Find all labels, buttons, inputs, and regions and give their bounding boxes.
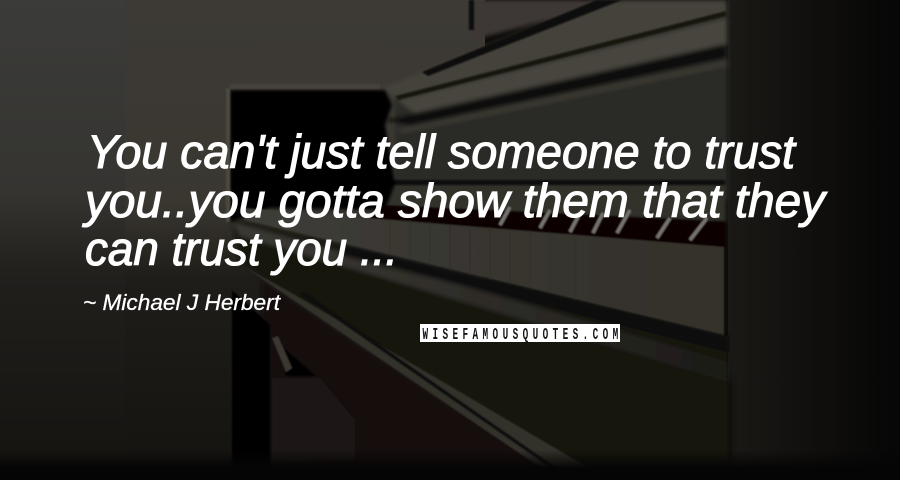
keyboard lower band <box>233 222 728 382</box>
upper panel wall <box>395 0 728 200</box>
wall <box>0 0 125 480</box>
top rail dark lines <box>396 0 726 100</box>
quote line 2: you..you gotta show them that they <box>82 174 828 227</box>
top rail <box>378 0 726 97</box>
lower panel <box>272 378 355 462</box>
quote line 3: can trust you ... <box>85 222 398 275</box>
quote line 1: You can't just tell someone to trust <box>87 125 797 178</box>
floor shadow <box>0 450 900 480</box>
key bed <box>245 208 724 335</box>
body below keyboard <box>232 218 728 480</box>
fall board <box>385 184 726 222</box>
right side shadow <box>728 0 900 480</box>
attribution: ~ Michael J Herbert <box>83 290 281 315</box>
black block <box>230 90 395 222</box>
light stripes between black keys <box>500 207 707 240</box>
fallboard top shadow <box>380 180 725 185</box>
dark leg <box>232 290 270 480</box>
watermark: WISEFAMOUSQUOTES.COM <box>422 327 618 345</box>
rail shadow <box>385 44 726 126</box>
middle rail <box>397 18 727 113</box>
quote text <box>82 125 828 275</box>
black keys <box>370 205 725 250</box>
key slits <box>390 219 575 300</box>
rail diagonal <box>243 266 609 480</box>
